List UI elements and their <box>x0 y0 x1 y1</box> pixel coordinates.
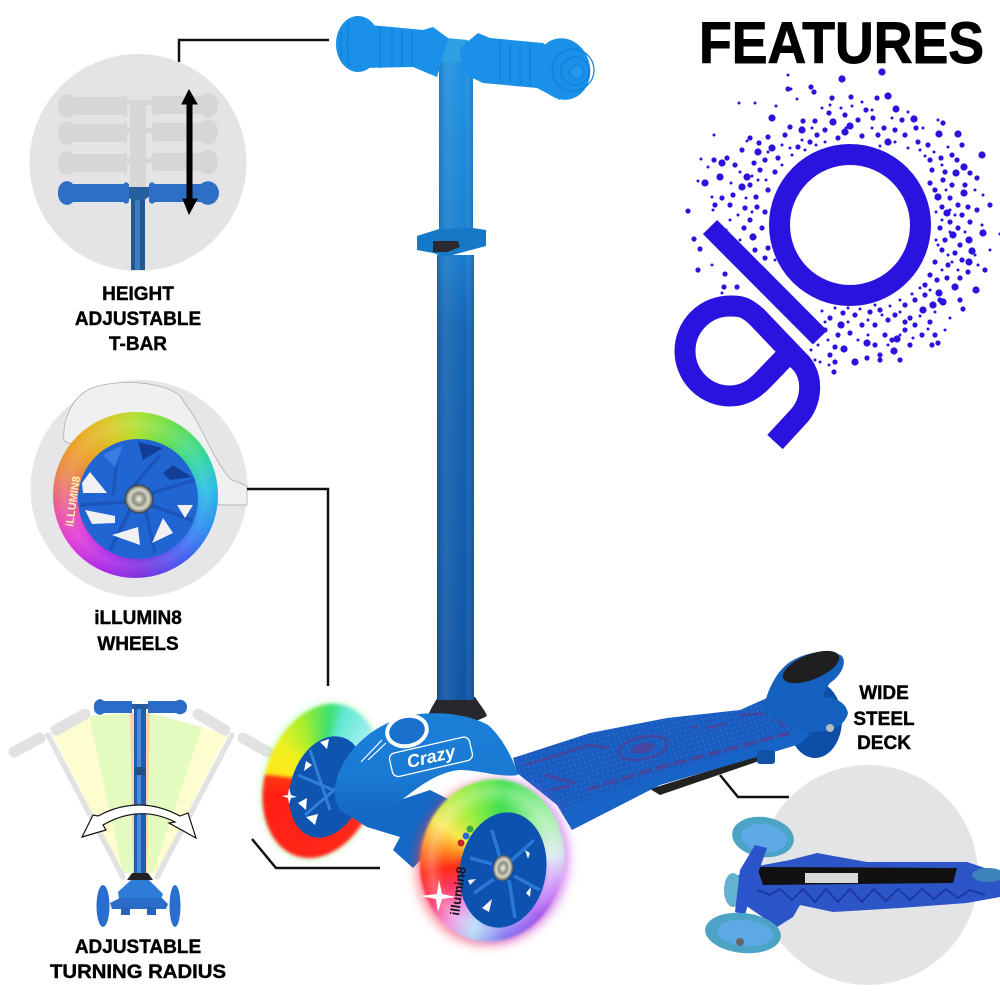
front wheel glowing ring <box>395 755 590 965</box>
stem clamp <box>417 228 486 257</box>
middle wheel <box>724 873 742 907</box>
logo letter l <box>710 227 820 338</box>
back wheel glowing ring <box>235 680 405 880</box>
tail wheel <box>972 868 1000 882</box>
front wheel lettering: illumin8 <box>447 866 469 916</box>
wheel bolt <box>125 485 153 513</box>
deck print <box>525 713 790 790</box>
top wheel <box>730 813 796 861</box>
hub holes <box>82 472 193 545</box>
axle bracket <box>340 790 450 868</box>
glo logo <box>685 72 1000 442</box>
deck underside shadow <box>650 756 765 795</box>
head glo logo <box>361 712 430 762</box>
label: illumin8 wheels: WHEELS <box>97 634 179 655</box>
back wheel sparkle <box>282 788 297 804</box>
callout line: wheels <box>247 489 328 686</box>
rainbow wheel ring <box>50 410 220 580</box>
left grip <box>336 16 448 77</box>
panel circle <box>30 380 248 597</box>
mini scooter centre <box>94 699 187 927</box>
label: height adjustable t-bar: T-BAR <box>109 334 167 355</box>
double arrow <box>182 90 197 214</box>
clamp lever <box>433 241 460 252</box>
label: height adjustable t-bar: HEIGHT <box>102 284 174 305</box>
deck side edge <box>557 727 810 830</box>
rear bracket <box>757 750 775 764</box>
title: FEATURES <box>699 11 984 76</box>
panel: height adjustable t-bar <box>30 54 246 271</box>
front wheel bolt <box>491 853 515 883</box>
wheel hub <box>78 439 198 559</box>
rear foot brake <box>779 644 843 690</box>
label: adjustable turning radius <box>50 937 226 983</box>
front wheel hub <box>451 805 555 935</box>
stem shading <box>437 255 474 700</box>
bottom wheel <box>703 909 783 957</box>
panel: illumin8 wheels <box>30 380 248 597</box>
stem upper <box>439 60 473 235</box>
deck underside <box>730 853 1000 927</box>
label: wide steel deck: WIDE <box>859 683 909 704</box>
head crazy badge: Crazy <box>405 741 458 772</box>
panel: wide steel deck <box>703 765 1000 985</box>
rear wheel <box>788 682 842 758</box>
panel circle <box>30 54 246 271</box>
back wheel hub <box>277 726 377 848</box>
t-bar cross tube <box>425 36 470 62</box>
logo letter g <box>685 306 810 442</box>
colour fan <box>53 713 227 873</box>
back wheel <box>235 680 405 880</box>
label: wide steel deck: DECK <box>857 733 911 754</box>
rear bolt <box>826 724 834 732</box>
curved double arrow <box>82 805 196 838</box>
label: wide steel deck: STEEL <box>853 709 915 730</box>
label: adjustable turning radius: ADJUSTABLE <box>75 937 201 958</box>
rear fender <box>763 652 848 733</box>
stem upper shading <box>439 60 473 235</box>
right grip <box>460 32 597 106</box>
ghost t-bars <box>58 93 218 192</box>
axle <box>735 845 767 915</box>
label: height adjustable t-bar: ADJUSTABLE <box>75 309 201 330</box>
ghost left t-bar <box>14 714 123 877</box>
logo letter o <box>780 154 920 296</box>
white fender <box>64 382 247 505</box>
scooter <box>235 16 848 965</box>
panel circle <box>758 765 978 985</box>
front wheel logo dots <box>458 826 474 846</box>
front wheel <box>395 755 590 965</box>
wheel ring lettering: iLLUMIN8 <box>64 476 83 527</box>
underside ribs <box>757 889 985 902</box>
main stem lower <box>437 255 474 700</box>
collar <box>428 697 487 724</box>
deck top <box>513 698 793 813</box>
callout line: turning radius <box>252 839 380 868</box>
steel strip <box>757 867 957 885</box>
sparkle <box>420 880 456 912</box>
head crazy badge <box>388 736 474 778</box>
panel: adjustable turning radius <box>14 699 268 927</box>
logo dot burst <box>688 72 1000 372</box>
callout line: t-bar <box>179 40 329 62</box>
steering head <box>335 713 518 816</box>
callout line: deck <box>720 775 789 797</box>
active t-bar <box>58 181 219 270</box>
label: adjustable turning radius: TURNING RADIUS <box>50 962 226 983</box>
sticker <box>805 873 858 883</box>
ghost right t-bar <box>157 714 268 877</box>
label: illumin8 wheels: iLLUMIN8 <box>94 608 182 629</box>
